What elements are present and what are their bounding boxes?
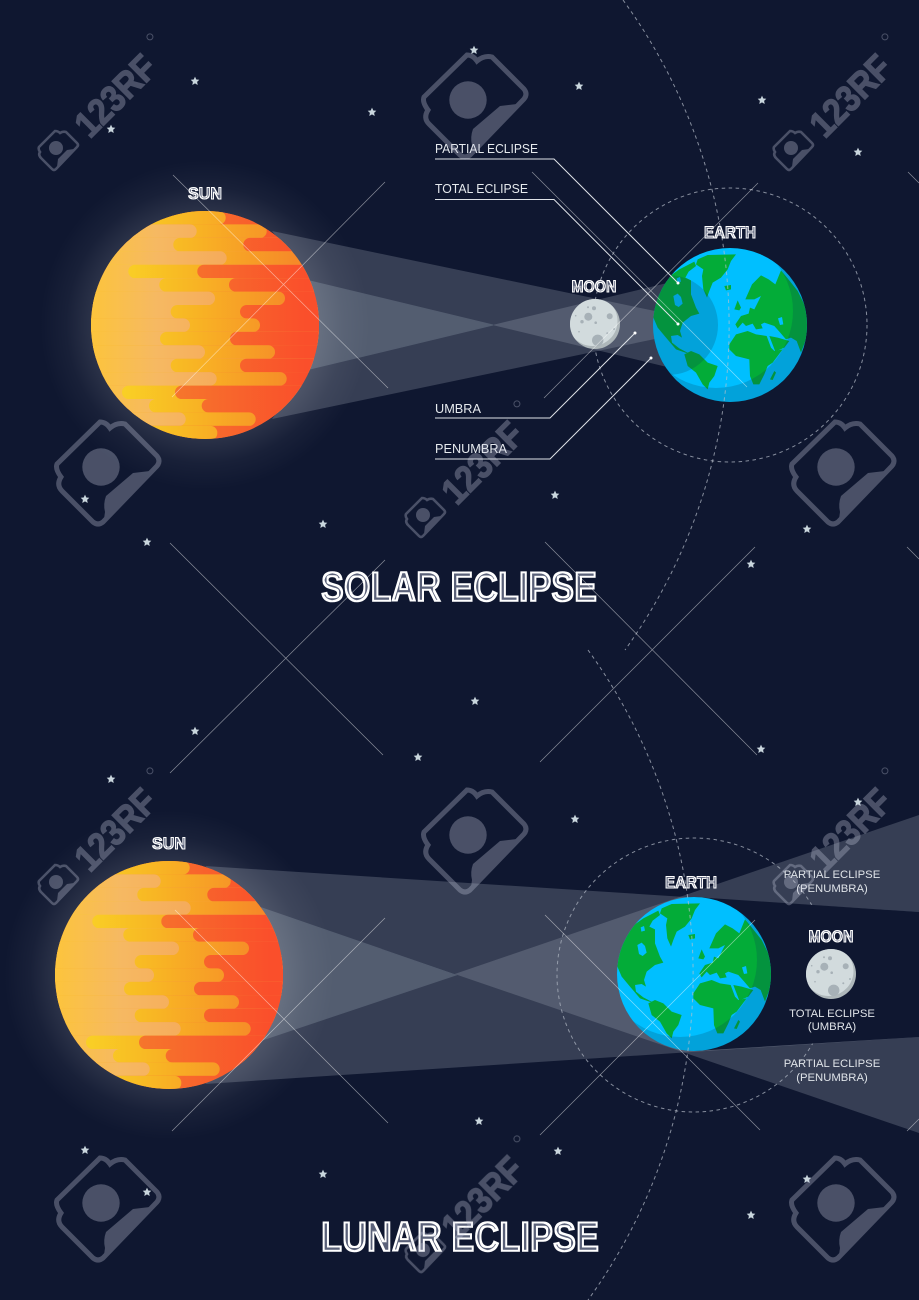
label: partial eclipse upper: (PENUMBRA) bbox=[796, 883, 868, 895]
sun glow bbox=[40, 160, 370, 490]
callout: partial eclipse bbox=[435, 141, 680, 284]
earth shadow bbox=[694, 897, 919, 1051]
moon bbox=[568, 296, 620, 349]
callout: total eclipse: TOTAL ECLIPSE bbox=[435, 181, 528, 196]
callout: penumbra: PENUMBRA bbox=[435, 441, 507, 456]
sun bbox=[39, 855, 407, 1095]
label: sun: SUN bbox=[152, 834, 186, 853]
callout: umbra: UMBRA bbox=[435, 401, 481, 416]
label: moon: MOON bbox=[572, 277, 616, 296]
panel: solar eclipse diagram bbox=[40, 0, 867, 650]
sun orbit arc bbox=[623, 0, 729, 650]
label: sun: SUN bbox=[188, 184, 222, 203]
earth bbox=[603, 883, 774, 1054]
stars bbox=[81, 46, 862, 1219]
callout: umbra bbox=[435, 332, 636, 418]
title: lunar eclipse: LUNAR ECLIPSE bbox=[321, 1213, 599, 1260]
title: solar eclipse: SOLAR ECLIPSE bbox=[321, 563, 597, 610]
sun glow bbox=[4, 810, 334, 1140]
label: earth: EARTH bbox=[665, 873, 717, 892]
moon bbox=[804, 946, 856, 999]
earth with moon shadow bbox=[653, 248, 807, 402]
label: partial eclipse lower: PARTIAL ECLIPSE bbox=[784, 1058, 881, 1070]
callout: partial eclipse: PARTIAL ECLIPSE bbox=[435, 141, 538, 156]
label: total eclipse: (UMBRA) bbox=[808, 1021, 856, 1033]
label: partial eclipse lower: (PENUMBRA) bbox=[796, 1072, 868, 1084]
label: moon: MOON bbox=[808, 927, 854, 946]
moon orbit bbox=[593, 188, 867, 462]
sun orbit arc bbox=[588, 650, 693, 1300]
moon orbit bbox=[557, 838, 831, 1112]
light beams bbox=[272, 231, 667, 419]
label: total eclipse: TOTAL ECLIPSE bbox=[789, 1008, 875, 1020]
light beams bbox=[205, 815, 919, 1133]
callout: total eclipse bbox=[435, 181, 680, 326]
callout: penumbra bbox=[435, 356, 652, 459]
sun bbox=[75, 205, 443, 445]
panel: lunar eclipse diagram bbox=[4, 650, 919, 1300]
label: partial eclipse upper: PARTIAL ECLIPSE bbox=[784, 869, 881, 881]
label: earth: EARTH bbox=[704, 223, 756, 242]
